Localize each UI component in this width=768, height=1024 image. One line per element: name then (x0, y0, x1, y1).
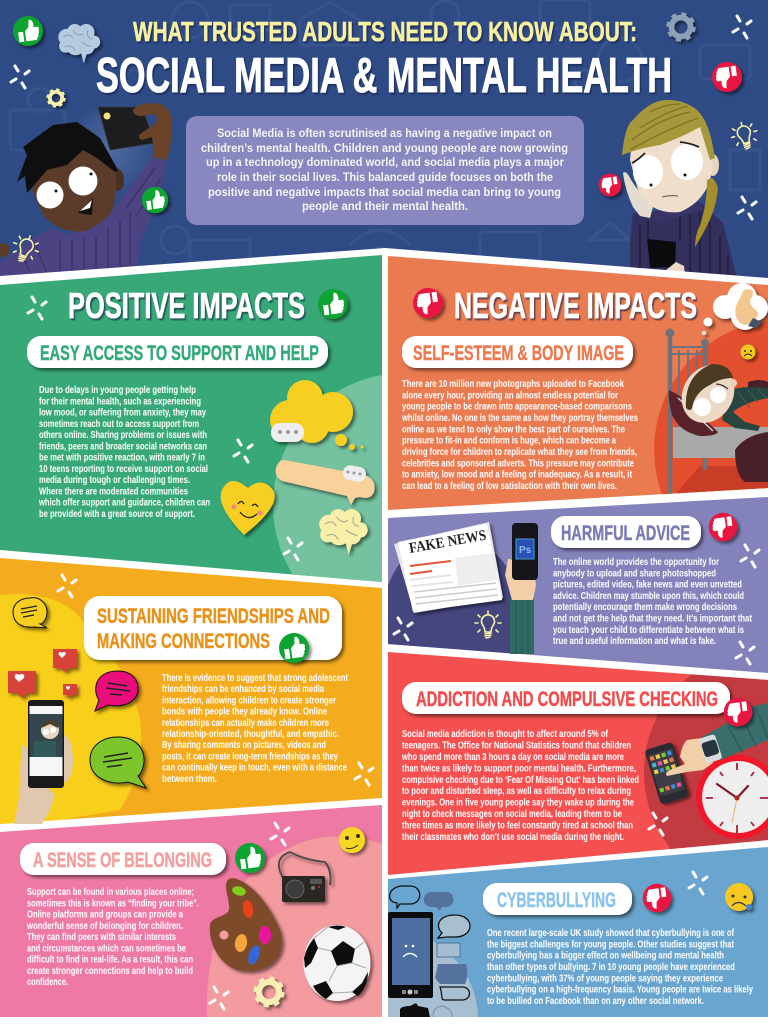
subheading pill: A SENSE OF BELONGING (33, 849, 212, 872)
panel: easy access to support and help (0, 255, 382, 582)
body text: Support can be found in various places online; (27, 887, 194, 898)
panel: harmful advice (388, 497, 768, 673)
icon: thought cloud with muscle (702, 283, 768, 335)
body text: to poor and disturbed sleep, as well as difficulty to relax during (402, 786, 631, 797)
icon: pink chat bubble (95, 671, 138, 711)
sparkle top right (741, 545, 759, 567)
body text: interaction, allowing children to create stronger (162, 695, 336, 706)
icon: green thumbs up top-left (13, 16, 43, 46)
icon: hand holding phone (14, 700, 73, 824)
body text: celebrities and sponsored adverts. This pressure may contribute (402, 458, 634, 469)
body text: confidence. (27, 977, 68, 988)
body text: to be bullied on Facebook than on any other social network. (487, 996, 704, 1007)
sparkle bottom right (736, 642, 754, 664)
body text: their classmates who don’t use social media during the night. (402, 832, 624, 843)
body text: pressure to fit-in and conform is huge, which can become a (402, 436, 616, 447)
icon: paint palette (210, 878, 282, 971)
intro text (201, 128, 568, 213)
icon: thumbs up (235, 843, 265, 873)
sparkle (689, 872, 707, 894)
body text: to anxiety, low mood and a feeling of inadequacy. As a result, it (402, 470, 633, 481)
heading: positive impacts: POSITIVE IMPACTS (68, 285, 305, 326)
icon: red like badges (8, 649, 77, 698)
intro text: Social Media is often scrutinised as having a negative impact on (217, 128, 552, 140)
illustration: phone with apps (644, 742, 689, 805)
intro text: up in a technology dominated world, and social media plays a major (206, 157, 564, 169)
body text (38, 385, 210, 520)
body text: online as we tend to only show the best part of ourselves. The (402, 424, 625, 435)
icon: small red thumbs down beside girl (599, 174, 621, 196)
illustration: fake news newspaper (394, 522, 503, 613)
illustration: hand holding phone: Ps (519, 545, 532, 556)
body text (401, 729, 639, 843)
intro panel (186, 116, 584, 225)
icon: thumbs down (709, 513, 737, 541)
icon: football (304, 925, 370, 1001)
body text: which offer support and guidance, children can (38, 498, 210, 509)
sparkle bottom (210, 987, 228, 1009)
subheading pill (84, 596, 342, 660)
body text: alone every hour, providing an almost endless potential for (402, 390, 618, 401)
illustration: alarm clock (696, 755, 768, 839)
sparkle top (271, 823, 289, 845)
illustration: child lying in bed (666, 328, 768, 494)
body text: Due to delays in young people getting help (39, 385, 196, 396)
subheading pill (402, 682, 730, 714)
body text: Where there are moderated communities (39, 486, 188, 497)
intro text: positive and negative impacts that social media can bring to young (208, 187, 561, 199)
panel: a sense of belonging (0, 805, 382, 1017)
body text: sometimes this is known as “finding your tribe”. (27, 898, 199, 909)
sparkle top (58, 575, 76, 597)
subheading pill (402, 336, 633, 368)
illustration: hand holding phone (505, 523, 538, 654)
character: boy taking selfie (0, 102, 172, 275)
subheading pill (551, 516, 701, 548)
icon: thumbs down (643, 884, 671, 912)
body text: than twice as likely to support poor mental health. Furthermore, (402, 763, 636, 774)
body text: friendships can be enhanced by social media (162, 684, 324, 695)
body text: anybody to upload and share photoshopped (553, 568, 716, 579)
subheading pill: MAKING CONNECTIONS (97, 630, 270, 653)
icon: lightbulb top-right (729, 119, 761, 152)
body text: They can find peers with similar interests (27, 932, 176, 943)
body text: young people to be drawn into appearance-based comparisons (402, 402, 632, 413)
panel: self-esteem and body image (388, 256, 768, 510)
body text: others online. Sharing problems or issues with (39, 430, 207, 441)
body text: difficult to find in real-life. As a result, this can (27, 954, 193, 966)
subheading pill (27, 336, 328, 368)
body text: teenagers. The Office for National Statistics found that children (402, 740, 631, 751)
icon: thumbs down heading (413, 288, 443, 318)
icon: small yellow chat bubble (13, 598, 47, 628)
sparkle top-left (11, 66, 29, 88)
subheading pill: HARMFUL ADVICE (561, 522, 690, 545)
panel: sustaining friendships (0, 558, 382, 830)
icon: green chat bubble (90, 737, 146, 788)
body text: be provided with a great source of support. (39, 509, 195, 520)
body text: whilst online. No one is the same as how they portray themselves (401, 413, 638, 424)
icon: emoji (339, 827, 365, 853)
body text: low mood, or suffering from anxiety, they may (39, 408, 206, 418)
body text: relationship-oriented, thoughtful, and empathic. (162, 729, 339, 740)
icon: lightbulb (475, 611, 501, 638)
icon: thumbs down (724, 698, 752, 726)
sparkle top-right (733, 16, 751, 38)
icon: red thumbs down top-right (712, 62, 742, 92)
illustration: arm with smartwatch (666, 703, 768, 776)
subheading pill: SELF-ESTEEM & BODY IMAGE (413, 342, 624, 365)
subheading pill (483, 883, 632, 915)
illustration: fake news newspaper: FAKE NEWS (408, 528, 488, 557)
character: worried girl (622, 100, 737, 278)
body text: and circumstances which can sometimes be (27, 943, 186, 954)
sparkle beside heading (28, 297, 46, 319)
body text: who spend more than 3 hours a day on social media are more (401, 752, 624, 763)
body text: three times as more likely to feel constantly tired at school than (402, 821, 633, 832)
sparkle (649, 813, 667, 835)
body text: bonds with people they already know. Online (162, 707, 327, 718)
icon: lightbulb by boy (9, 231, 42, 266)
subheading pill: EASY ACCESS TO SUPPORT AND HELP (40, 342, 319, 365)
body text: sometimes reach out to access support from (39, 419, 199, 430)
body text (487, 928, 753, 1007)
body text: posts, it can create long-term friendships as they (162, 751, 338, 762)
body text: evenings. One in five young people say they wake up during the (402, 798, 634, 809)
body text: The online world provides the opportunity for (553, 557, 719, 568)
icon: cream gear (256, 979, 282, 1005)
body text: There are 10 million new photographs uploaded to Facebook (402, 379, 624, 390)
body text (401, 379, 638, 492)
subheading pill: SUSTAINING FRIENDSHIPS AND (97, 605, 330, 628)
panel: cyberbullying (388, 847, 768, 1017)
body text: between them. (162, 774, 217, 785)
sparkle left (394, 618, 412, 640)
body text: night to check messages on social media, leading them to be (402, 809, 622, 820)
body text: create stronger connections and help to build (27, 966, 193, 977)
icon: radio (279, 852, 330, 902)
icon: brain top-left (58, 24, 100, 63)
icon: thumbs up (279, 633, 309, 663)
icon: thumbs up heading (318, 289, 348, 319)
body text: There is evidence to suggest that strong adolescent (162, 673, 349, 684)
body text: wonderful sense of belonging for children. (26, 921, 183, 932)
body text: true and useful information and what is fake. (553, 636, 716, 647)
body text: relationships can actually make children more (162, 718, 329, 729)
intro text: children’s mental health. Children and young people are now growing (201, 143, 568, 155)
icon: yellow thought cloud (270, 380, 364, 450)
sparkle near brain (284, 538, 302, 560)
sparkle right (738, 197, 756, 219)
panel: addiction and compulsive checking (388, 652, 768, 875)
icon: peach speech bar (276, 460, 375, 505)
intro text: role in their social lives. This balanced guide focuses on both the (217, 172, 553, 184)
icon: green thumbs up beside boy (142, 187, 168, 213)
subheading pill: CYBERBULLYING (497, 889, 616, 912)
body text: be met with positive reaction, with nearly 7 in (39, 453, 205, 464)
icon: crying emoji (725, 883, 753, 911)
body text (26, 887, 199, 988)
subheading pill (20, 843, 226, 875)
sparkle near bubbles (234, 440, 252, 462)
icon: grey gear (669, 15, 693, 39)
icon: crying emoji (740, 344, 756, 360)
body text: friends, peers and broader social networks can (39, 441, 207, 452)
body text: for their mental health, such as experiencing (39, 396, 201, 407)
sparkle right (355, 763, 373, 785)
body text: Online platforms and groups can provide a (27, 910, 183, 920)
body text: can lead to a feeling of low satisfaction with their own lives. (402, 481, 617, 492)
illustration: sad phone with message bubbles (388, 886, 470, 1017)
body text: driving force for children to replicate what they see from friends, (402, 447, 637, 458)
icon: smiling heart (221, 481, 275, 535)
body text: Social media addiction is thought to affect around 5% of (402, 729, 609, 740)
body text (162, 673, 349, 785)
body text: media during tough or challenging times. (39, 475, 190, 486)
body text: 10 teens reporting to receive support on social (39, 464, 208, 475)
intro text: people and their mental health. (302, 201, 468, 213)
body text: can continually keep in touch, even with a distance (162, 763, 347, 774)
header background (0, 0, 768, 300)
icon: cream brain (319, 509, 368, 555)
body text (553, 557, 753, 647)
body text: By sharing comments on pictures, videos and (162, 740, 326, 751)
icon: small yellow gear (48, 90, 64, 106)
white sheet under panels (0, 248, 768, 1024)
body text: compulsive checking due to ‘Fear Of Missing Out’ has been linked (402, 775, 639, 786)
